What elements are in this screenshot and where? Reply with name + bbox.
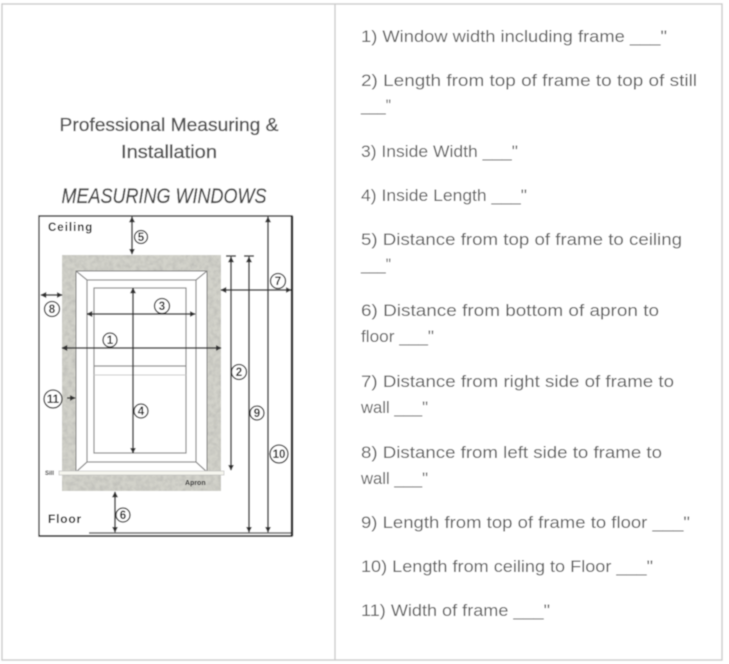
measurement number callouts: 11: [47, 394, 60, 406]
measurement list: 4) Inside Length ___": [361, 186, 527, 205]
room labels: Ceiling: [48, 222, 93, 234]
measurement list: 5) Distance from top of frame to ceiling: [361, 230, 682, 249]
measurement list: 7) Distance from right side of frame to: [361, 372, 674, 391]
heading: Professional Measuring &: [60, 115, 278, 135]
measurement list: wall ___": [360, 398, 428, 417]
measurement number callouts: 8: [49, 304, 56, 316]
measurement number callouts: 10: [273, 449, 285, 461]
measurement list: [360, 27, 697, 620]
measurement list: 3) Inside Width ___": [361, 142, 518, 161]
measurement arrows: [41, 217, 291, 532]
room labels: [45, 222, 206, 526]
measurement list: 11) Width of frame ___": [361, 601, 550, 620]
measurement number callouts: 3: [159, 301, 165, 313]
window measuring diagram: [39, 216, 292, 536]
measurement list: 8) Distance from left side to frame to: [361, 443, 662, 462]
measurement number callouts: 4: [138, 406, 145, 418]
window casing: [59, 255, 224, 491]
measurement list: ___": [360, 255, 391, 274]
measurement number callouts: 1: [107, 335, 114, 347]
measurement number callouts: 9: [254, 408, 260, 420]
measurement list: 2) Length from top of frame to top of still: [361, 71, 697, 90]
diagram title: measuring windows: MEASURING WINDOWS: [62, 185, 266, 208]
measurement list: floor ___": [361, 327, 434, 346]
measurement number callouts: 7: [275, 276, 281, 288]
room outline: [39, 216, 292, 536]
measurement list: 9) Length from top of frame to floor ___": [361, 513, 690, 532]
room labels: Apron: [185, 480, 206, 487]
measurement number callouts: 6: [120, 510, 126, 522]
measurement list: 10) Length from ceiling to Floor ___": [361, 557, 653, 576]
measurement number callouts: 5: [138, 232, 145, 244]
room labels: Floor: [48, 512, 82, 526]
measurement list: 6) Distance from bottom of apron to: [361, 301, 659, 320]
measurement list: wall ___": [360, 469, 428, 488]
heading: Installation: [121, 142, 217, 162]
measurement list: 1) Window width including frame ___": [361, 27, 667, 46]
measurement number callouts: [44, 230, 288, 522]
room labels: Sill: [45, 471, 54, 477]
heading: [60, 115, 278, 162]
measurement number callouts: 2: [236, 367, 242, 379]
measurement list: ___": [360, 96, 391, 115]
